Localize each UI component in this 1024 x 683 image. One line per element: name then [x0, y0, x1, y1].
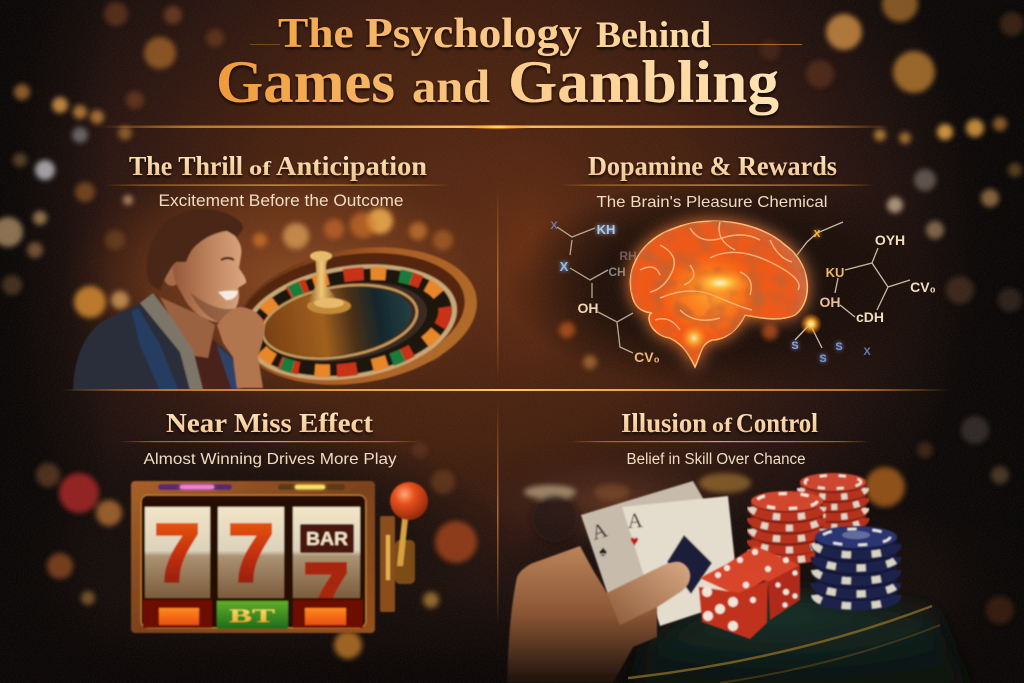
brain folds: [640, 222, 799, 330]
title: Behind: [596, 15, 711, 56]
reel 3: BAR: [306, 529, 348, 549]
slot machine: [131, 481, 428, 638]
right molecule: OH: [820, 294, 840, 310]
center button: BT: [229, 606, 276, 627]
title: and: [412, 61, 490, 113]
left molecule: RH: [619, 249, 637, 263]
reel 1: [145, 507, 210, 599]
hair: [147, 209, 243, 290]
heading: [129, 151, 427, 181]
reel 3: 7: [303, 547, 349, 638]
red chip stack front: [751, 491, 823, 562]
table: [628, 595, 970, 683]
playing cards: A: [627, 508, 644, 533]
title: Gambling: [508, 49, 779, 115]
title: The Psychology: [278, 11, 582, 57]
panel dividers: [60, 190, 950, 625]
heading: of: [712, 413, 733, 437]
center button: [217, 601, 288, 629]
heading: Near Miss Effect: [166, 408, 373, 438]
left molecule: X: [550, 220, 558, 232]
eye: [221, 258, 234, 260]
right molecule: cDH: [856, 309, 884, 325]
left molecule: [550, 220, 660, 365]
wheel spindle: [307, 251, 351, 314]
beard shadow: [190, 292, 236, 322]
reel 1: 7: [154, 508, 200, 599]
right molecule: KU: [826, 265, 844, 280]
left molecule: KH: [597, 222, 615, 237]
heading: of: [249, 158, 271, 180]
playing cards: A: [589, 517, 611, 545]
title ornament lines: [100, 44, 890, 130]
back card: [581, 481, 704, 610]
subheading: The Brain's Pleasure Chemical: [596, 194, 828, 211]
red chip stack back: [800, 473, 866, 535]
dice: [699, 546, 800, 639]
playing cards: [581, 481, 739, 626]
marquee lights: [158, 484, 345, 490]
brain texture: [630, 221, 807, 367]
ear: [163, 260, 181, 286]
heading rule: [105, 184, 450, 186]
left button: [143, 600, 212, 628]
right molecule: S: [791, 340, 799, 352]
playing cards: ♠: [599, 543, 607, 560]
heading: The Thrill: [129, 151, 243, 181]
left molecule: CH: [608, 265, 626, 279]
playing cards: ♥: [630, 533, 639, 550]
heading: [621, 408, 818, 438]
left molecule: OH: [578, 300, 598, 316]
title: [216, 11, 779, 115]
hand: [217, 307, 265, 388]
card diamond: [667, 535, 712, 594]
heading: Dopamine & Rewards: [588, 151, 837, 181]
left molecule: CV₀: [634, 349, 660, 365]
panel: illusion of control: [507, 408, 970, 683]
lever: [380, 482, 428, 612]
heading: Control: [736, 408, 818, 438]
reel 2: [218, 507, 284, 599]
right molecule: OYH: [875, 232, 905, 248]
subheading: Belief in Skill Over Chance: [626, 451, 806, 468]
blue chip stack: [815, 526, 897, 608]
shirt: [190, 340, 232, 390]
jacket: [73, 293, 242, 390]
reel 3: [292, 506, 362, 600]
man: [73, 209, 265, 390]
right molecule: CV₀: [910, 279, 936, 295]
reel window: [141, 495, 366, 628]
front card: [622, 496, 739, 626]
title: Games: [216, 49, 395, 115]
panel: dopamine and rewards: [550, 151, 936, 367]
heading: Illusion: [621, 408, 707, 438]
right molecule: S: [835, 341, 843, 353]
heading rule: [560, 184, 875, 186]
right molecule: S: [819, 353, 827, 365]
heading rule: [120, 441, 420, 442]
hand: [507, 546, 690, 683]
reel 2: 7: [228, 508, 274, 599]
roulette wheel: [227, 231, 487, 401]
brain: [630, 221, 822, 367]
cabinet: [131, 481, 375, 633]
panel: the thrill of anticipation: [73, 151, 487, 401]
brain central glow: [686, 268, 754, 298]
left molecule: X: [560, 259, 569, 274]
subheading: Almost Winning Drives More Play: [144, 451, 396, 468]
subheading: Excitement Before the Outcome: [158, 192, 404, 210]
neck: [160, 297, 215, 358]
heading: Anticipation: [276, 151, 427, 181]
right molecule: X: [814, 229, 821, 240]
right button: [293, 600, 363, 628]
right molecule: X: [863, 346, 871, 358]
face: [173, 230, 246, 322]
collar: [140, 293, 203, 390]
right molecule: [791, 222, 936, 365]
panel: near miss effect: [120, 408, 428, 638]
smile: [218, 291, 238, 300]
heading rule: [570, 441, 870, 442]
